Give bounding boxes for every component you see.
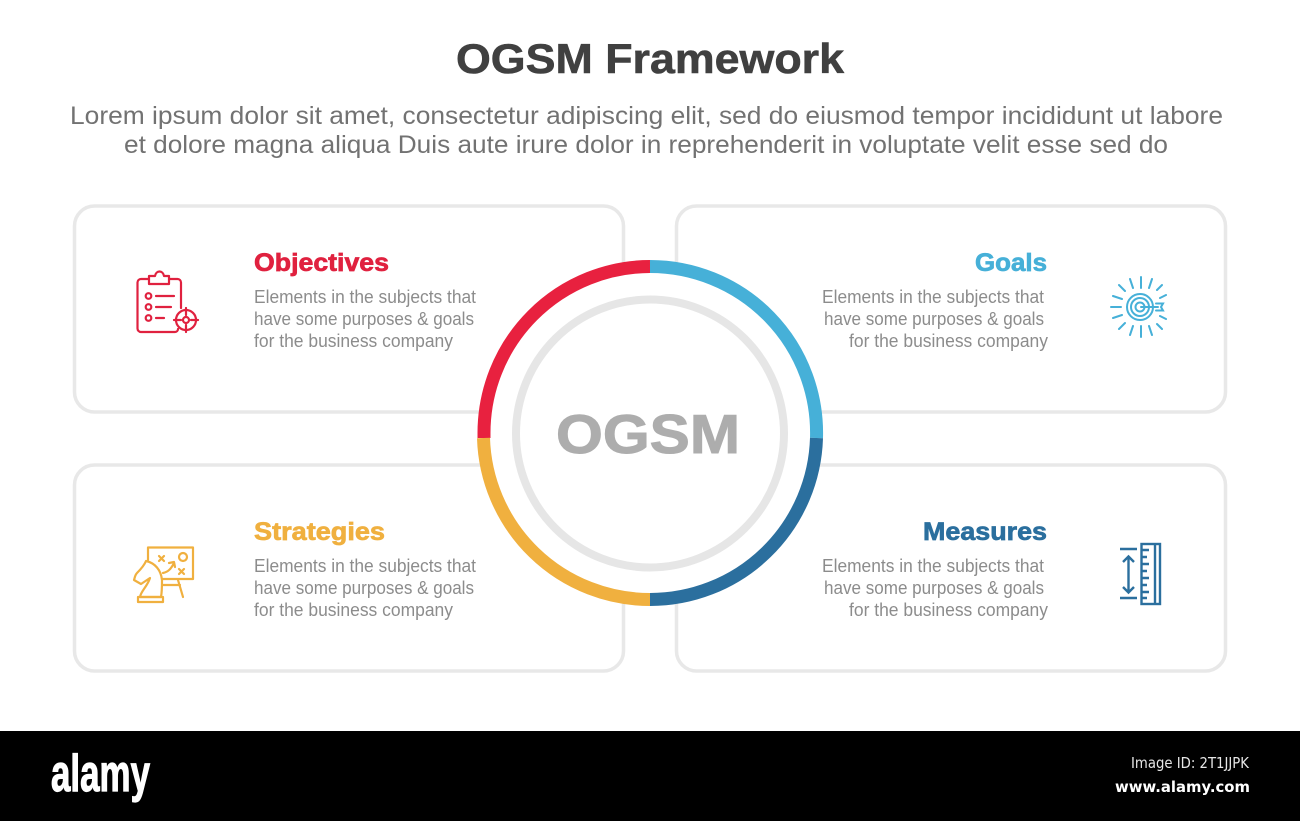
inner ring (516, 300, 784, 568)
goals heading: Goals (975, 249, 1047, 277)
footer bar (0, 731, 1300, 821)
measures text: for the business company (849, 600, 1048, 620)
measures text: have some purposes & goals (824, 578, 1044, 598)
icon: clipboard with target (138, 272, 198, 332)
goals text: have some purposes & goals (824, 309, 1044, 329)
goals text (822, 287, 1048, 351)
panel: objectives (74, 206, 624, 412)
measures text (822, 556, 1048, 620)
goals text: Elements in the subjects that (822, 287, 1044, 307)
panel: measures (676, 465, 1226, 671)
center circle (478, 261, 822, 605)
ring segment: strategies (484, 438, 650, 600)
subtitle text: et dolore magna aliqua Duis aute irure dolor in reprehenderit in voluptate velit esse sed do (124, 131, 1168, 159)
objectives text (254, 287, 476, 351)
center label: OGSM (556, 403, 740, 465)
measures text: Elements in the subjects that (822, 556, 1044, 576)
strategies heading: Strategies (254, 518, 385, 546)
panel: goals (676, 206, 1226, 412)
strategies text: for the business company (254, 600, 453, 620)
objectives heading: Objectives (254, 249, 389, 277)
ring segment: measures (650, 438, 816, 600)
strategies text: have some purposes & goals (254, 578, 474, 598)
panel: strategies (74, 465, 624, 671)
objectives text: for the business company (254, 331, 453, 351)
image id: Image ID: 2T1JJPK (1131, 754, 1250, 772)
objectives text: Elements in the subjects that (254, 287, 476, 307)
objectives text: have some purposes & goals (254, 309, 474, 329)
icon: target with rays (1111, 277, 1166, 337)
strategies text (254, 556, 476, 620)
website: www.alamy.com (1115, 778, 1250, 796)
icon: chess knight and strategy board (134, 548, 193, 602)
title: OGSM Framework (456, 35, 845, 82)
subtitle text (70, 102, 1223, 159)
goals text: for the business company (849, 331, 1048, 351)
subtitle text: Lorem ipsum dolor sit amet, consectetur adipiscing elit, sed do eiusmod tempor incididunt ut labore (70, 102, 1223, 130)
strategies text: Elements in the subjects that (254, 556, 476, 576)
alamy logo: alamy (51, 745, 150, 803)
ring segment: objectives (484, 266, 650, 438)
icon: ruler with arrows (1120, 544, 1160, 604)
measures heading: Measures (923, 518, 1047, 546)
ring segment: goals (650, 266, 817, 438)
